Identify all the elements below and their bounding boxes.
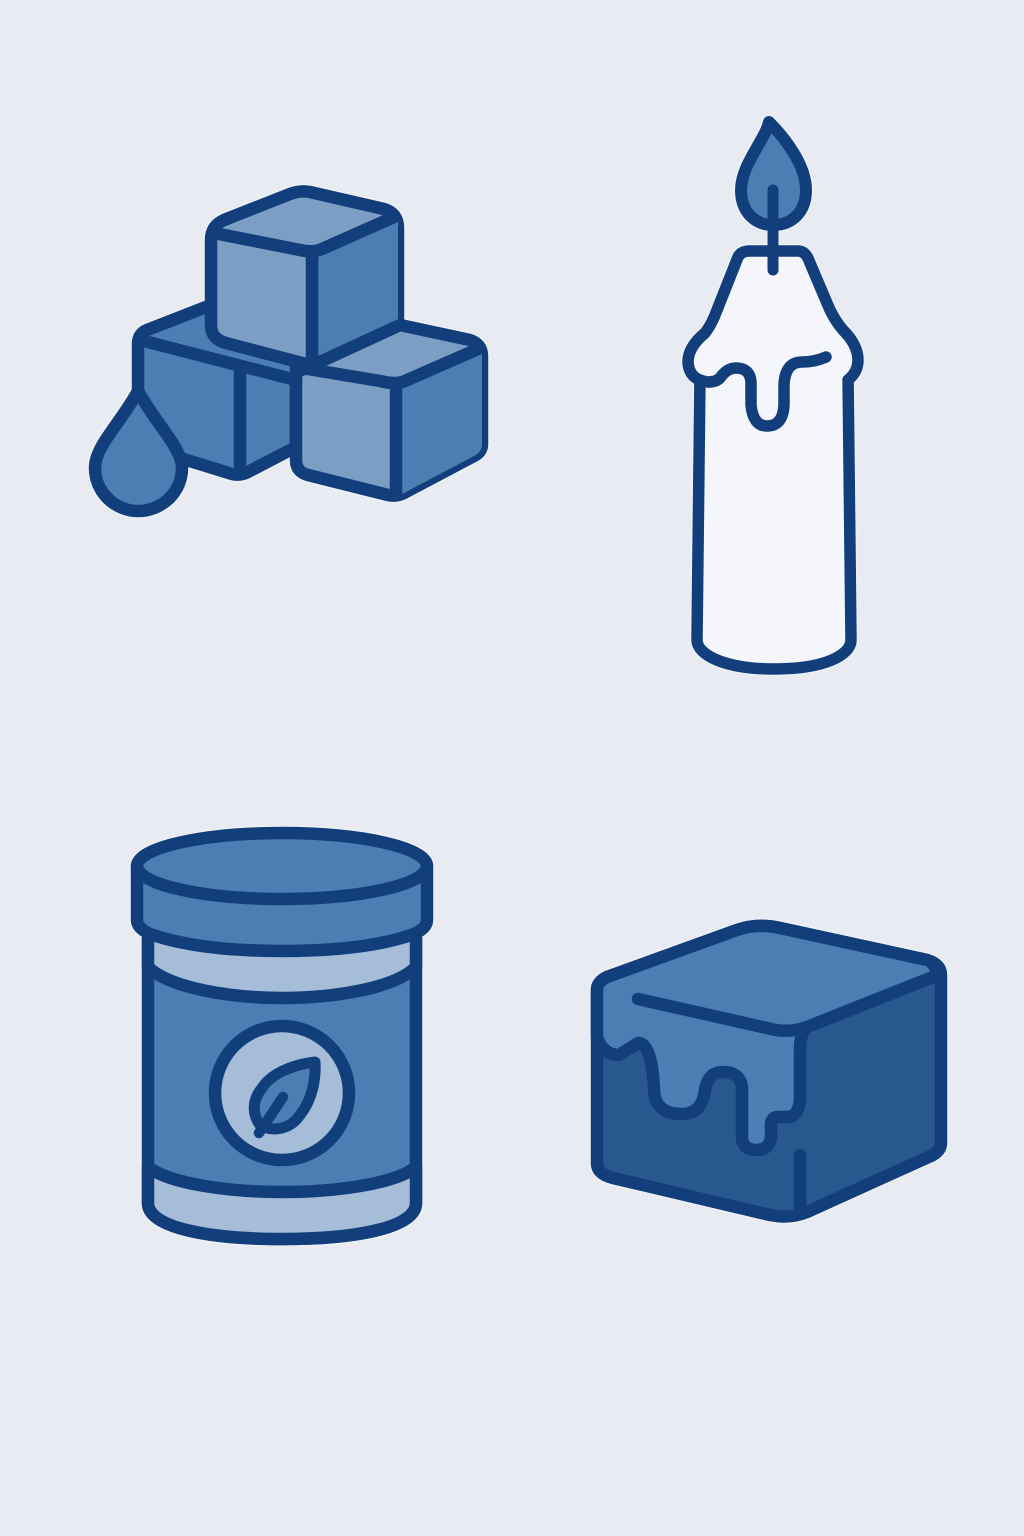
back left cube (138, 307, 296, 475)
top edges and corner (638, 975, 938, 1210)
top cube (211, 191, 398, 365)
leaf (254, 1062, 315, 1129)
icon: jar with leaf label (137, 833, 427, 1239)
candle body (697, 372, 851, 669)
icon: wax block with drips (597, 926, 941, 1216)
upper pale band (148, 925, 416, 998)
icon: lit candle (688, 122, 858, 669)
leaf vein (259, 1097, 283, 1133)
lid top (137, 833, 427, 899)
melted wax outline (688, 251, 858, 426)
water drop (95, 391, 182, 511)
block body (597, 926, 941, 1216)
jar body (148, 930, 416, 1239)
wick (768, 190, 778, 270)
candle top fill (688, 251, 858, 382)
lower pale band (148, 1167, 416, 1239)
lid (137, 866, 427, 951)
melted wax top and drips (597, 926, 938, 1150)
icon: stacked wax cubes with drop (95, 191, 482, 511)
flame (741, 122, 806, 225)
leaf badge (215, 1026, 349, 1160)
right cube (296, 325, 482, 496)
